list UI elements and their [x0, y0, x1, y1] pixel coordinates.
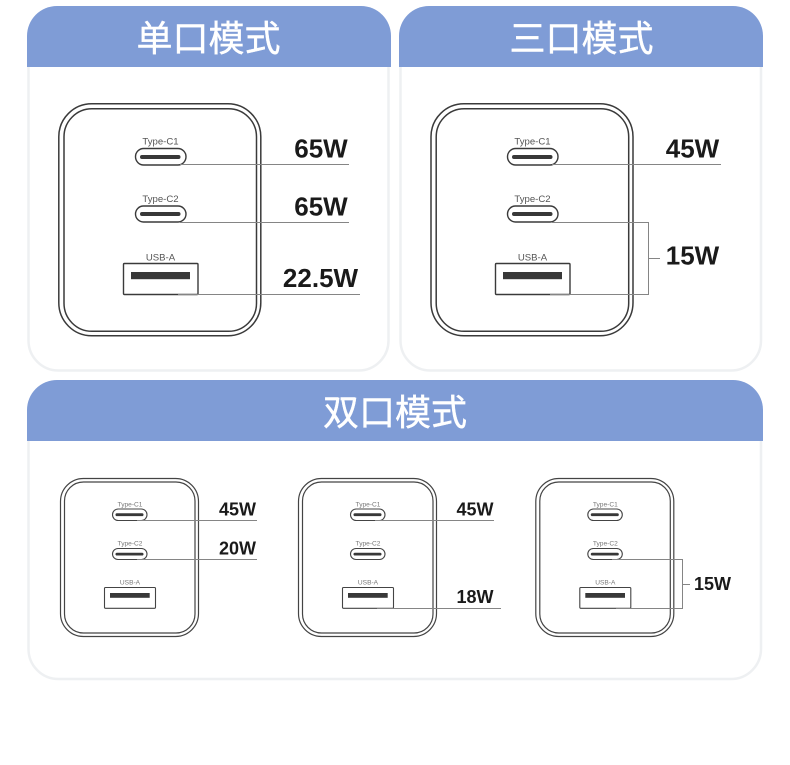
label: USB-A 22.5W: 22.5W	[283, 263, 359, 293]
charger: three-port mode	[431, 104, 633, 336]
port: Type-C1: Type-C1	[514, 137, 551, 148]
port: USB-A	[104, 580, 156, 608]
charger: single-port mode	[59, 104, 261, 336]
label: Type-C1 45W	[137, 500, 257, 520]
port: USB-A: USB-A	[146, 253, 176, 264]
port: Type-C2: Type-C2	[514, 194, 551, 205]
header: three-port mode	[399, 6, 763, 67]
port: Type-C2	[588, 541, 622, 560]
panel: three-port mode	[399, 6, 763, 370]
port: Type-C1: Type-C1	[118, 501, 143, 508]
label: USB-A 18W	[377, 587, 501, 608]
label: Type-C1 45W: 45W	[219, 500, 256, 520]
port: Type-C2	[112, 541, 147, 560]
port: USB-A: USB-A	[358, 580, 379, 587]
heading: 双口模式: 双口模式	[323, 392, 467, 433]
port: Type-C1: Type-C1	[142, 137, 179, 148]
heading: 单口模式: 单口模式	[136, 18, 281, 59]
label: bracket 15W: 15W	[694, 574, 731, 594]
label: bracket 15W	[612, 560, 731, 608]
header: dual-port mode	[27, 380, 763, 441]
label: Type-C1 45W: 45W	[666, 134, 720, 164]
label: Type-C1 65W: 65W	[294, 134, 348, 164]
port: Type-C1: Type-C1	[356, 501, 381, 508]
label: USB-A 18W: 18W	[456, 587, 494, 607]
header: single-port mode	[27, 6, 391, 67]
panel: dual-port mode	[27, 380, 763, 679]
heading: 三口模式: 三口模式	[509, 18, 654, 59]
port: Type-C1	[588, 501, 622, 520]
port: Type-C2: Type-C2	[356, 541, 381, 548]
label: bracket 15W	[550, 222, 720, 294]
label: Type-C2 65W: 65W	[294, 192, 348, 222]
port: Type-C2	[350, 541, 385, 560]
port: Type-C2: Type-C2	[142, 194, 179, 205]
label: Type-C2 20W: 20W	[219, 539, 256, 559]
port: Type-C1	[508, 137, 558, 165]
label: Type-C1 45W	[375, 500, 494, 520]
charger: dual-port option 2	[298, 478, 436, 636]
port: USB-A: USB-A	[518, 253, 548, 264]
port: Type-C1	[350, 501, 385, 520]
charger: dual-port option 1	[60, 478, 198, 636]
port: USB-A	[342, 580, 394, 608]
port: Type-C2: Type-C2	[118, 541, 143, 548]
label: Type-C2 20W	[137, 539, 257, 560]
label: bracket 15W: 15W	[666, 240, 720, 270]
port: Type-C2: Type-C2	[593, 541, 618, 548]
port: Type-C1	[112, 501, 147, 520]
port: Type-C1	[136, 137, 186, 165]
panel: single-port mode	[27, 6, 391, 370]
port: USB-A: USB-A	[595, 580, 616, 587]
port: USB-A	[580, 580, 631, 608]
port: Type-C1: Type-C1	[593, 501, 618, 508]
charger: dual-port option 3	[536, 478, 674, 636]
port: Type-C2	[136, 194, 186, 222]
port: Type-C2	[508, 194, 558, 222]
port: USB-A	[496, 253, 570, 294]
label: Type-C1 45W: 45W	[456, 500, 494, 520]
port: USB-A: USB-A	[120, 580, 141, 587]
port: USB-A	[124, 253, 198, 294]
